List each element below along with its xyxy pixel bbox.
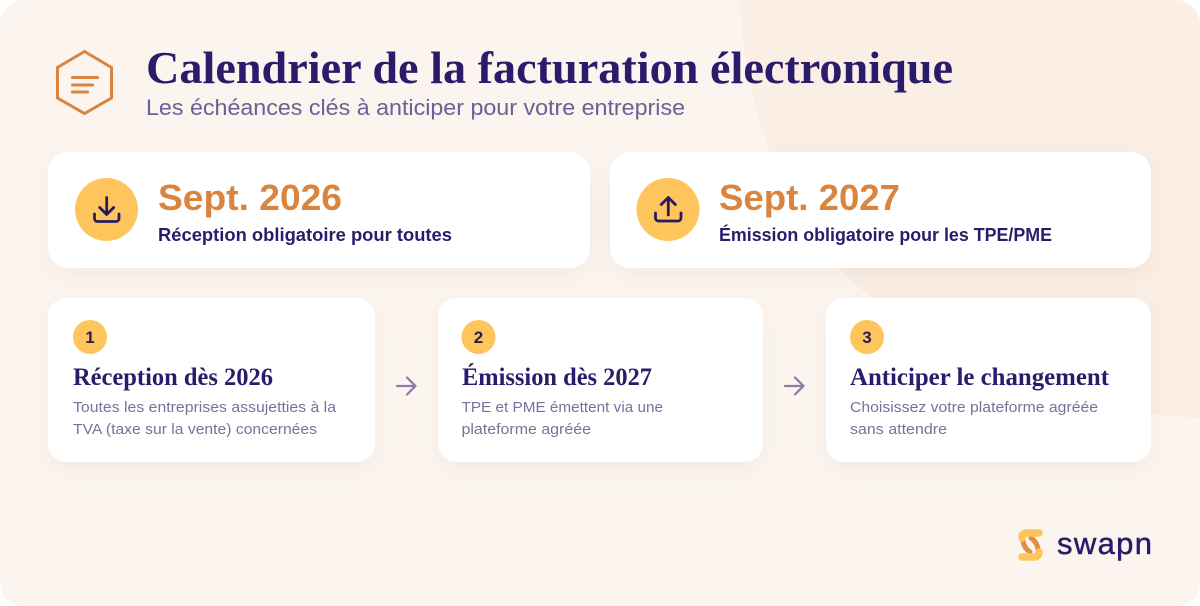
- panel: step 2: [438, 298, 763, 462]
- step text: TVA (taxe sur la vente) concernées: [73, 421, 317, 438]
- icon: download: [75, 178, 138, 241]
- logo: swapn: [1022, 526, 1152, 561]
- step text: sans attendre: [850, 421, 947, 438]
- wordmark: swapn: [1057, 526, 1152, 561]
- panel: septembre 2027: [610, 152, 1151, 268]
- step number 3: [850, 320, 884, 354]
- icon: logo mark: [1022, 533, 1039, 557]
- step heading: Réception dès 2026: [73, 364, 273, 391]
- arrow 1: [397, 378, 416, 394]
- panel: septembre 2026: [48, 152, 590, 268]
- step text: TPE et PME émettent via une: [462, 399, 663, 416]
- panel: step 1: [48, 298, 375, 462]
- step text: plateforme agréée: [462, 421, 591, 438]
- icon: upload: [636, 178, 700, 241]
- arrow 2: [785, 378, 804, 394]
- description: Émission obligatoire pour les TPE/PME: [719, 224, 1052, 245]
- step number 1: [73, 320, 107, 354]
- date: Sept. 2027: [719, 177, 900, 218]
- step heading: Émission dès 2027: [462, 363, 652, 391]
- description: Réception obligatoire pour toutes: [158, 225, 452, 245]
- panel: step 3: [826, 298, 1151, 462]
- step number 1: 1: [85, 328, 95, 347]
- subtitle: Les échéances clés à anticiper pour votre entreprise: [146, 95, 685, 120]
- step text: Choisissez votre plateforme agréée: [850, 399, 1098, 416]
- step heading: Anticiper le changement: [850, 364, 1110, 391]
- step number 2: [462, 320, 496, 354]
- date: Sept. 2026: [158, 177, 342, 218]
- icon: document hexagon: [58, 52, 112, 114]
- step number 2: 2: [474, 328, 483, 347]
- step text: Toutes les entreprises assujetties à la: [73, 399, 337, 416]
- title: Calendrier de la facturation électronique: [146, 42, 953, 93]
- step number 3: 3: [862, 328, 872, 347]
